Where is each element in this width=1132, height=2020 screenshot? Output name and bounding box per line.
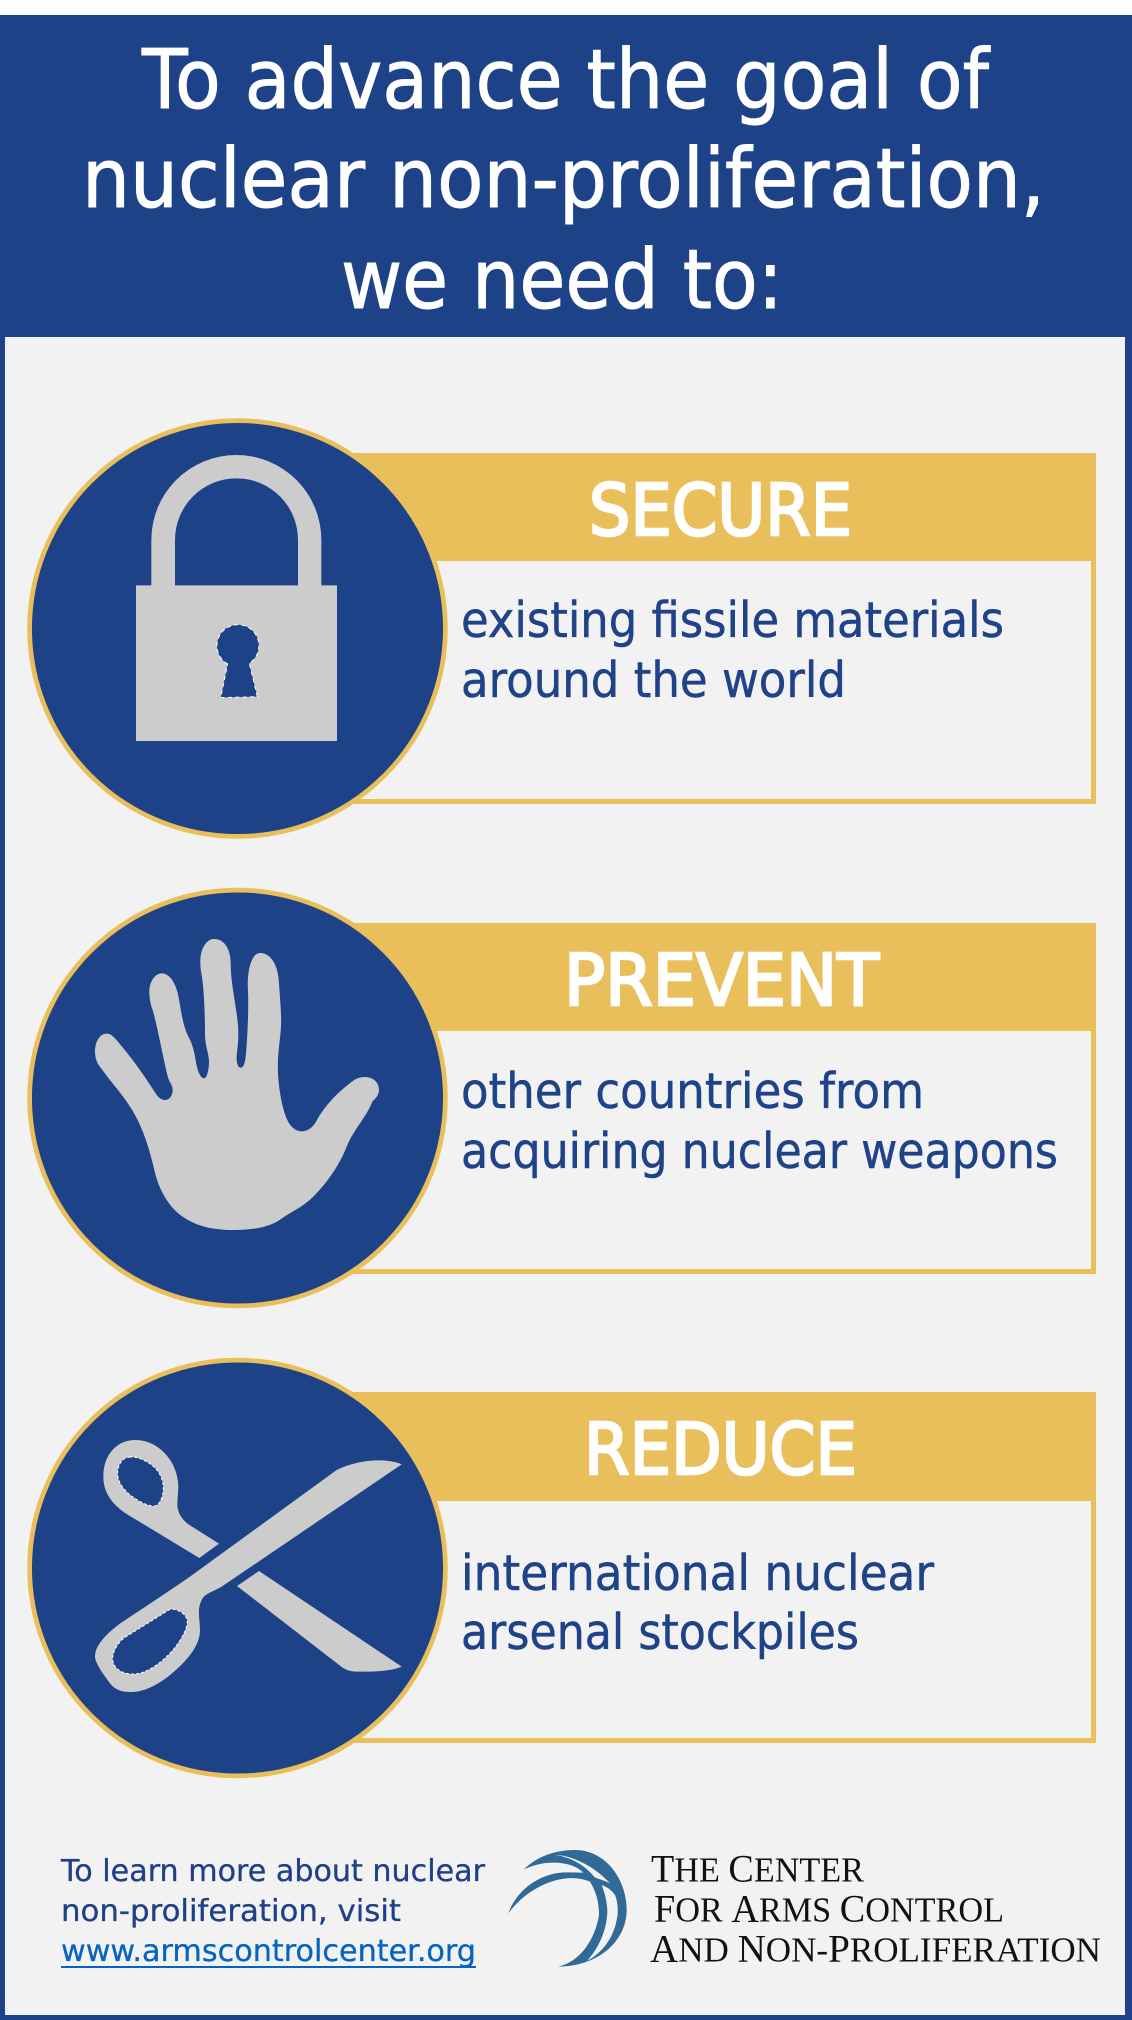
footer call to action: non-proliferation, visit [61,1894,401,1929]
panel: prevent [30,890,1096,1306]
prevent description [461,1063,1058,1180]
logo mark [508,1850,627,1967]
panel: secure [30,421,1096,836]
title: nuclear non-proliferation, [82,132,1045,227]
secure description: around the world [461,652,846,709]
footer call to action [60,1854,486,1969]
icon: hand [95,939,379,1230]
reduce heading: REDUCE [584,1408,857,1491]
reduce description: international nuclear [461,1545,935,1602]
panel: reduce [30,1360,1096,1776]
prevent description: acquiring nuclear weapons [461,1123,1058,1180]
prevent heading: PREVENT [564,939,880,1022]
prevent circle [30,890,445,1306]
logo wordmark: AND NON-PROLIFERATION [650,1928,1101,1970]
prevent description: other countries from [461,1063,924,1120]
secure description: existing fissile materials [461,592,1004,649]
secure card [300,453,1096,804]
title: we need to: [341,233,783,328]
secure heading: SECURE [589,469,852,552]
logo wordmark [650,1848,1101,1970]
secure description [461,592,1004,709]
reduce description: arsenal stockpiles [461,1604,859,1661]
title [82,33,1045,328]
footer call to action: To learn more about nuclear [60,1854,486,1889]
icon: scissors [95,1440,402,1692]
reduce circle [30,1360,445,1776]
website link: www.armscontrolcenter.org [61,1934,476,1969]
reduce card [300,1392,1096,1743]
title: To advance the goal of [141,33,991,128]
reduce description [461,1545,935,1661]
logo wordmark: THE CENTER [651,1848,865,1890]
secure circle [30,421,445,836]
icon: padlock [136,455,337,741]
prevent card [300,923,1096,1274]
logo wordmark: FOR ARMS CONTROL [654,1888,1004,1930]
